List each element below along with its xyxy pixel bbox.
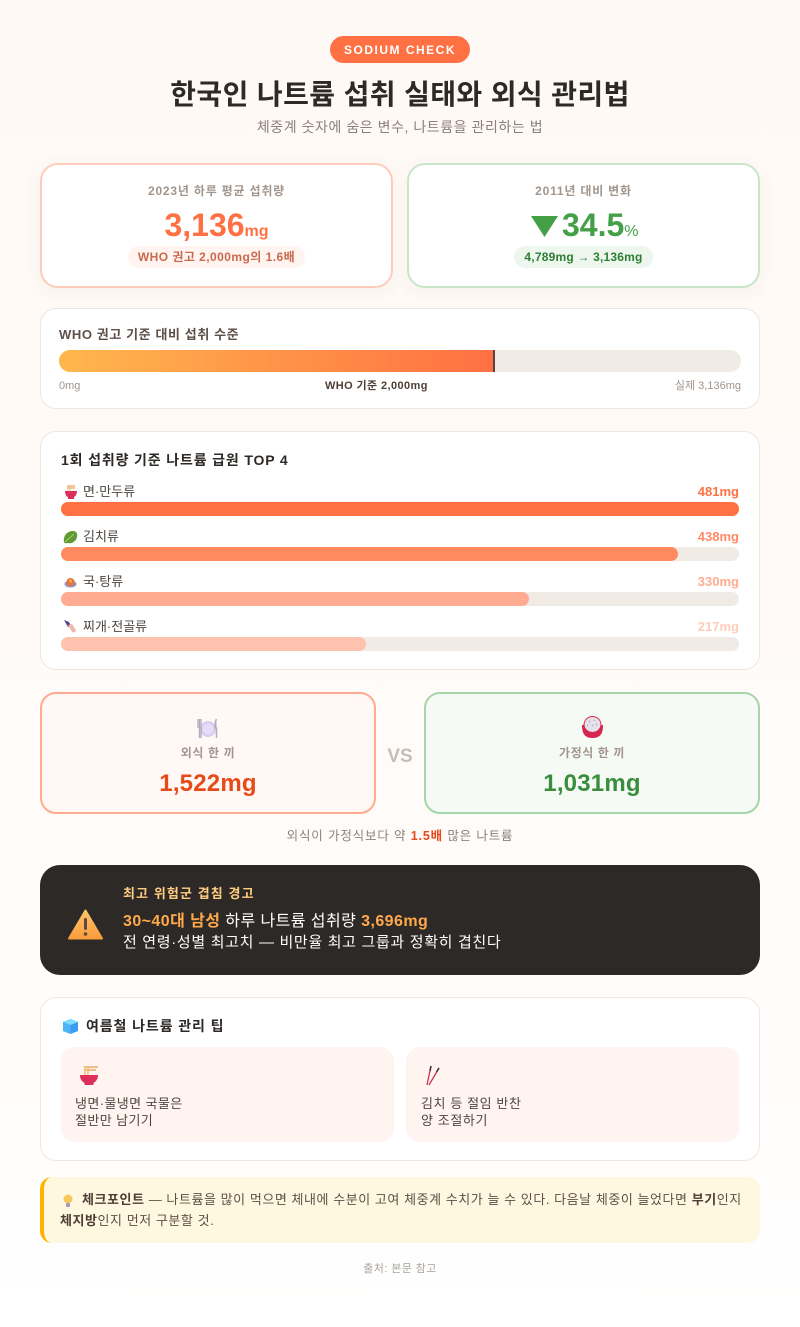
warning heading: 최고 위험군 겹침 경고 (123, 886, 255, 901)
tip text: 냉면·물냉면 국물은 (75, 1096, 183, 1111)
title: 한국인 나트륨 섭취 실태와 외식 관리법 (170, 79, 630, 110)
value: 438mg: 438mg (698, 529, 739, 544)
tip text: 양 조절하기 (421, 1113, 488, 1128)
stat: 3,136mg: 3,136mg (164, 207, 269, 243)
label: eating out: 외식 한 끼 (181, 746, 235, 760)
checkpoint text: 체지방인지 먼저 구분할 것. (60, 1213, 214, 1228)
bar: stews (61, 637, 739, 651)
label: kimchi: 김치류 (83, 529, 119, 544)
icon: light bulb (64, 1194, 72, 1207)
gauge label: WHO standard: WHO 기준 2,000mg (325, 380, 428, 392)
vs label: VS (387, 746, 413, 767)
gauge label: actual: 실제 3,136mg (675, 380, 741, 392)
source note: 출처: 본문 참고 (363, 1263, 437, 1275)
tip text (75, 1096, 183, 1128)
panel: summer tips (40, 997, 760, 1161)
icon: down triangle (531, 216, 558, 237)
row: stews (61, 619, 739, 651)
tip text: 절반만 남기기 (75, 1113, 153, 1128)
label: soups: 국·탕류 (83, 574, 123, 589)
label: 2023 intake: 2023년 하루 평균 섭취량 (148, 184, 285, 198)
pill: 4,789 to 3,136: 4,789mg → 3,136mg (524, 250, 643, 264)
stat: 34.5%: 34.5% (562, 207, 639, 243)
value: 481mg: 481mg (698, 484, 739, 499)
panel: home meal (424, 692, 760, 814)
label: stews: 찌개·전골류 (83, 619, 147, 634)
icon: soup pot (64, 578, 76, 588)
tip: pickled side dishes (406, 1047, 739, 1142)
icon: chopsticks (426, 1066, 440, 1086)
tip text (421, 1096, 522, 1128)
icon: stew ingredient (64, 620, 76, 632)
icon: noodle bowl (65, 485, 77, 499)
bar: noodles (61, 502, 739, 516)
warning line 1: 30~40대 남성 하루 나트륨 섭취량 3,696mg (123, 913, 428, 930)
tips heading: 여름철 나트륨 관리 팁 (86, 1018, 224, 1034)
pill: WHO ratio (128, 246, 305, 268)
value: 1,031mg: 1,031mg (543, 770, 641, 797)
panel: WHO gauge (40, 308, 760, 409)
checkpoint text: 체크포인트 — 나트륨을 많이 먹으면 체내에 수분이 고여 체중계 수치가 늘 수 있다. 다음날 체중이 늘었다면 부기인지 (82, 1192, 742, 1207)
warning line 2: 전 연령·성별 최고치 — 비만율 최고 그룹과 정확히 겹친다 (123, 934, 501, 951)
panel: eating out (40, 692, 376, 814)
chart heading: 1회 섭취량 기준 나트륨 급원 TOP 4 (61, 452, 289, 468)
panel: 2023 daily intake (40, 163, 393, 288)
tip text: 김치 등 절임 반찬 (421, 1096, 522, 1111)
bar: kimchi (61, 547, 739, 561)
icon: plate with cutlery (197, 718, 218, 738)
icon: rice bowl (582, 716, 603, 738)
bar: soups (61, 592, 739, 606)
badge: sodium check: SODIUM CHECK (344, 43, 456, 57)
panel: change since 2011 (407, 163, 760, 288)
value: 330mg: 330mg (698, 574, 739, 589)
pill: WHO ratio: WHO 권고 2,000mg의 1.6배 (138, 250, 295, 264)
icon: warning triangle (68, 910, 103, 940)
pill: 4,789 to 3,136 (514, 246, 653, 268)
checkpoint text (60, 1192, 742, 1228)
value: 1,522mg: 1,522mg (159, 770, 257, 797)
label: 2011 comparison: 2011년 대비 변화 (535, 184, 632, 198)
icon: ice cube (63, 1019, 78, 1034)
gauge heading: WHO 권고 기준 대비 섭취 수준 (59, 327, 239, 342)
row: soups (61, 574, 739, 606)
label: home meal: 가정식 한 끼 (559, 746, 625, 760)
label: noodles: 면·만두류 (83, 484, 135, 499)
row: kimchi (61, 529, 739, 561)
subtitle: 체중계 숫자에 숨은 변수, 나트륨을 관리하는 법 (257, 119, 543, 135)
gauge label: 0mg: 0mg (59, 380, 80, 392)
icon: leafy green (64, 531, 78, 544)
panel: high risk warning (40, 865, 760, 975)
badge: sodium check (330, 36, 470, 63)
gauge track and fill (59, 350, 741, 372)
row: noodles (61, 484, 739, 516)
callout: checkpoint (40, 1177, 760, 1243)
comparison note: 외식이 가정식보다 약 1.5배 많은 나트륨 (287, 829, 513, 843)
tip: cold noodle broth (61, 1047, 394, 1142)
icon: noodle bowl (80, 1066, 98, 1085)
value: 217mg: 217mg (698, 619, 739, 634)
panel: top 4 sodium sources (40, 431, 760, 670)
